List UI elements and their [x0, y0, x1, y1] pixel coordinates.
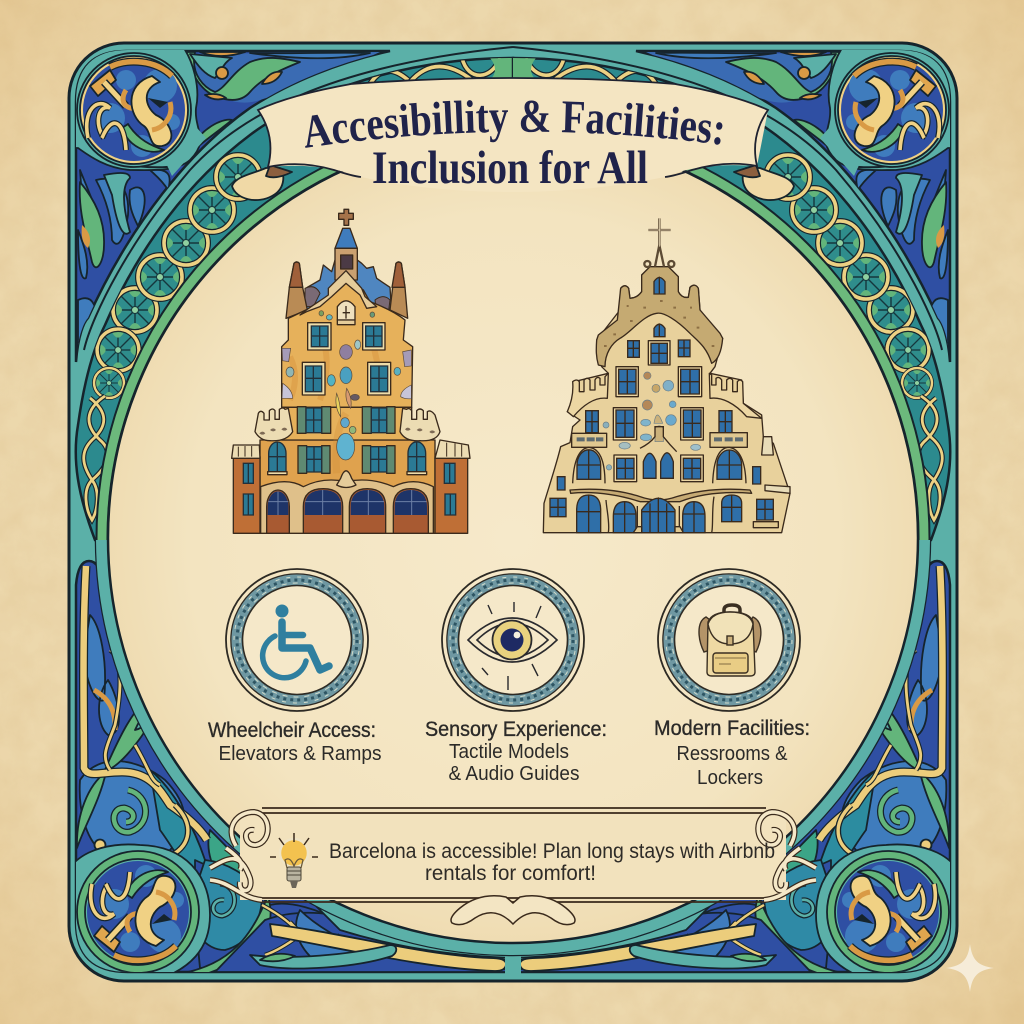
mosaic discs right facade [603, 372, 701, 470]
central parchment circle with rings [96, 121, 930, 955]
tip text: Barcelona is accessible! Plan long stays with Airbnb [329, 840, 775, 863]
icon: wheelchair [263, 604, 329, 678]
outer teal frame [69, 43, 957, 981]
title text: Accesibillity & Facilities: [305, 100, 722, 148]
title text [305, 100, 722, 194]
medallion: modern facilities [658, 569, 800, 711]
building: Casa Mila style right [543, 218, 790, 533]
title ribbon [232, 78, 794, 200]
label: wheelchair access: Wheelcheir Access: [208, 719, 376, 742]
tip text [329, 840, 775, 885]
tip text: rentals for comfort! [425, 862, 596, 885]
label: sensory experience: Sensory Experience: [425, 718, 607, 741]
icon: eye [468, 602, 557, 690]
label: modern facilities [654, 717, 810, 789]
ornamental frame: right half [513, 40, 966, 985]
ornamental frame: left half [60, 40, 513, 985]
sparkle watermark [946, 944, 994, 992]
label: modern facilities: Modern Facilities: [654, 717, 810, 740]
ribbon body [258, 78, 768, 192]
label: sensory experience: & Audio Guides [448, 763, 580, 785]
ribbon curl left [232, 168, 283, 200]
label: wheelchair access [208, 719, 382, 765]
building: Casa Batllo style left [232, 209, 470, 533]
label: modern facilities: Lockers [697, 767, 763, 789]
mosaic discs left facade [282, 311, 411, 460]
icon: light bulb [270, 833, 318, 888]
frame centre stem [505, 948, 521, 979]
ribbon outline [258, 78, 768, 177]
tip box [210, 808, 816, 925]
icon: backpack [699, 605, 761, 676]
title text: Inclusion for All [372, 142, 648, 194]
flourish under tip box [451, 896, 575, 925]
label: sensory experience [425, 718, 607, 785]
label: modern facilities: Ressrooms & [676, 743, 788, 765]
label: sensory experience: Tactile Models [449, 741, 569, 763]
scroll ornaments [210, 812, 816, 900]
ribbon curl right [743, 168, 794, 200]
medallion: wheelchair access [226, 569, 368, 711]
label: wheelchair access: Elevators & Ramps [218, 743, 382, 765]
cross finial [644, 218, 674, 267]
medallion: sensory experience [442, 569, 584, 711]
